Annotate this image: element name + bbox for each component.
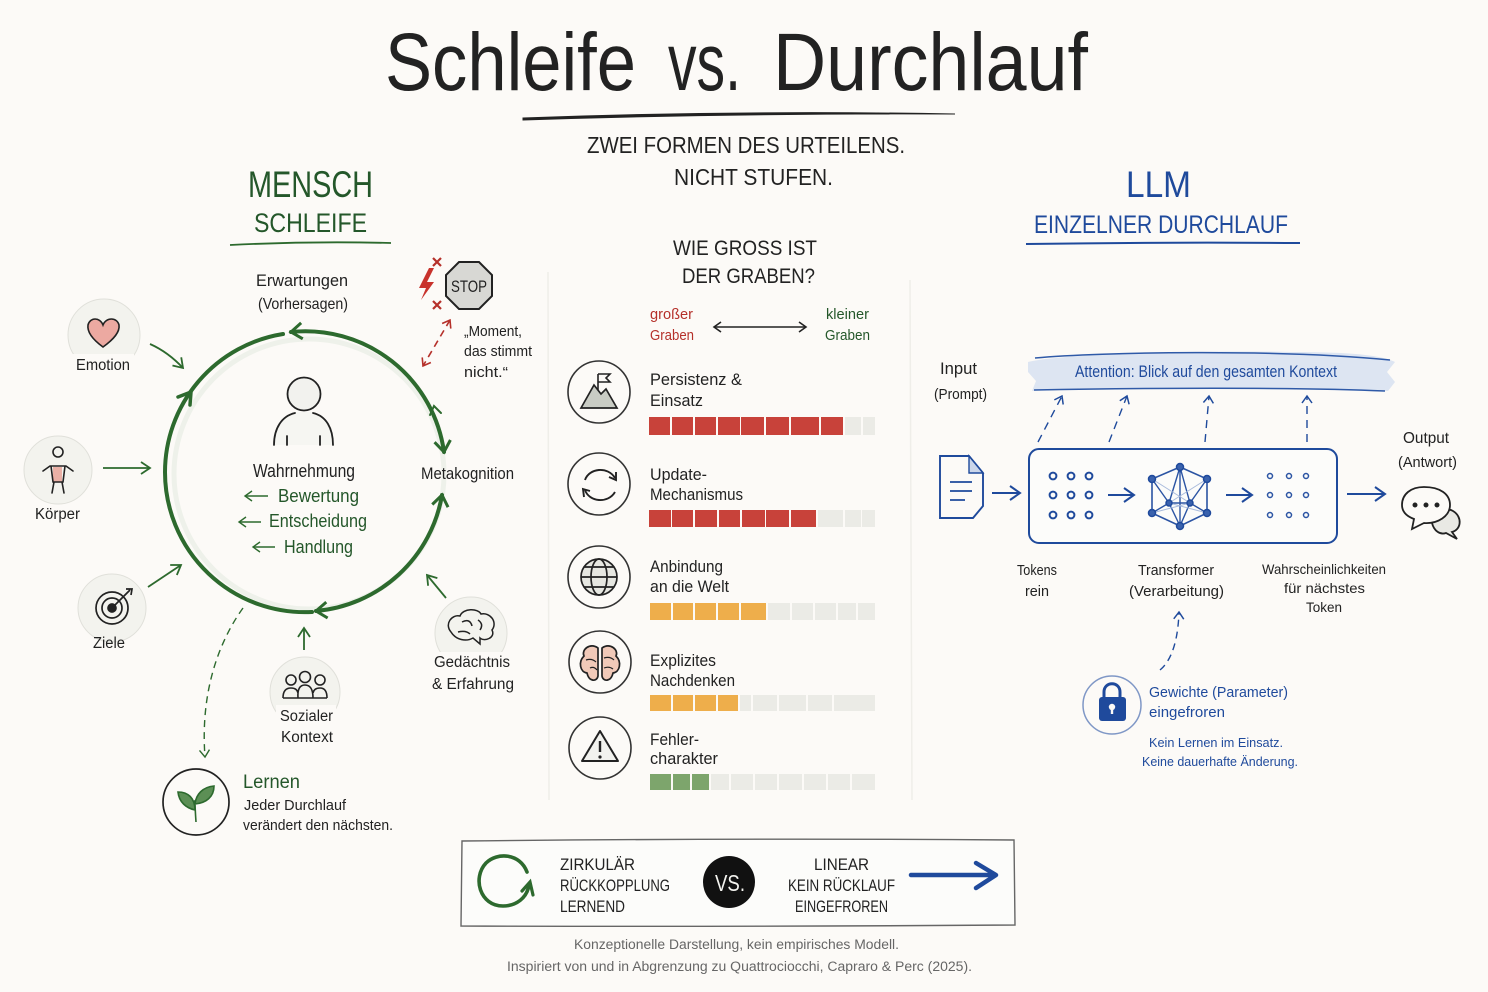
heading: Mensch Schleife: MENSCH (248, 164, 373, 205)
arrow: linear (911, 863, 996, 888)
label: Transformer: (Verarbeitung) (1129, 584, 1224, 600)
model box (1029, 449, 1337, 543)
callout: Moment: das stimmt (464, 344, 532, 360)
badge: VS (703, 856, 755, 908)
label: Erwartungen (256, 271, 348, 313)
panel: summary bar (461, 839, 1015, 926)
panel: LLM pipeline (934, 351, 1460, 769)
icon: chat bubbles (1402, 487, 1460, 539)
title: Schleife (385, 17, 636, 108)
heading: LLM einzelner Durchlauf (1026, 164, 1300, 244)
process steps: Wahrnehmung (253, 461, 355, 481)
text: frozen weights: Keine dauerhafte Änderung. (1142, 754, 1298, 769)
callout: Moment: nicht.“ (464, 365, 508, 381)
label: Tokens rein: rein (1025, 584, 1049, 600)
heading: Mensch Schleife (230, 164, 391, 245)
text: linear: LINEAR (814, 856, 869, 874)
label: Input: (Prompt) (934, 386, 987, 403)
input: Emotion: Emotion (76, 357, 130, 374)
label: Output: (Antwort) (1398, 454, 1457, 471)
text: frozen weights: Kein Lernen im Einsatz. (1149, 735, 1283, 750)
text: Lernen: Lernen (243, 772, 300, 793)
label: Wahrscheinlichkeiten: Wahrscheinlichkeiten (1262, 561, 1386, 577)
label: Wahrscheinlichkeiten: Token (1306, 599, 1342, 615)
row: Anbindung an die Welt (568, 546, 875, 620)
probabilities grid (1268, 474, 1308, 518)
heading: gap question (673, 237, 817, 288)
text: linear: EINGEFROREN (795, 898, 888, 916)
row: Explizites Nachdenken (569, 631, 875, 711)
text: circular: ZIRKULÄR (560, 856, 635, 874)
panel: human loop (24, 258, 532, 835)
row: Update-Mechanismus (568, 453, 875, 527)
scale legend: Graben (650, 327, 694, 344)
process steps (239, 461, 367, 557)
heading: gap question: DER GRABEN? (682, 265, 815, 288)
tokens grid (1050, 473, 1092, 518)
arrow: tokens to transformer (1108, 494, 1134, 496)
scale legend: kleiner (826, 306, 869, 323)
input: Sozialer Kontext: Kontext (281, 729, 334, 746)
text: circular (560, 856, 670, 916)
label: Tokens rein: Tokens (1017, 563, 1057, 579)
input: Sozialer Kontext (270, 628, 340, 746)
arrow: to model (992, 492, 1020, 494)
dashed attention arrows (1038, 396, 1307, 442)
input: Gedächtnis & Erfahrung: Gedächtnis (434, 654, 510, 671)
loop circle with arrows (165, 331, 444, 612)
text: circular: RÜCKKOPPLUNG (560, 877, 670, 895)
row: Persistenz: Persistenz & (650, 370, 743, 389)
row: Fehlercharakter: Fehler- (650, 730, 699, 749)
dashed red arrow (423, 320, 450, 366)
input: Gedächtnis & Erfahrung (427, 575, 518, 694)
badge: VS: VS. (715, 870, 745, 896)
label: Transformer: Transformer (1138, 563, 1214, 579)
icon: plant (163, 769, 229, 835)
arrow: to output (1347, 493, 1385, 495)
scale legend: Graben (825, 327, 870, 344)
label: Transformer (1129, 563, 1224, 600)
row: Update-Mechanismus: Mechanismus (650, 485, 743, 504)
text: frozen weights: Gewichte (Parameter) (1149, 684, 1288, 701)
text: circular: LERNEND (560, 898, 625, 916)
subtitle: ZWEI FORMEN DES URTEILENS. (587, 132, 905, 158)
subtitle (587, 132, 905, 190)
row: Explizites Nachdenken: Explizites (650, 651, 716, 670)
dashed arrow to Lernen (204, 608, 243, 757)
text: Lernen (243, 772, 393, 834)
label: Erwartungen: Erwartungen (256, 271, 348, 290)
input: Körper: Körper (35, 506, 80, 523)
callout: Moment (464, 324, 532, 381)
heading: LLM einzelner Durchlauf: LLM (1126, 164, 1191, 205)
input: Gedächtnis & Erfahrung: & Erfahrung (432, 676, 514, 693)
label: Output (1398, 430, 1457, 471)
title: Durchlauf (773, 17, 1088, 108)
row: Explizites Nachdenken: Nachdenken (650, 671, 735, 690)
transformer network (1148, 464, 1210, 530)
text: linear: KEIN RÜCKLAUF (788, 877, 895, 895)
title (385, 17, 1088, 120)
heading: gap question: WIE GROSS IST (673, 237, 817, 260)
label: Metakognition: Metakognition (421, 465, 514, 483)
heading: LLM einzelner Durchlauf: EINZELNER DURCHLAUF (1034, 211, 1288, 239)
icon: lock (1083, 676, 1141, 734)
label: Wahrscheinlichkeiten (1262, 561, 1386, 615)
subtitle: NICHT STUFEN. (674, 164, 833, 190)
icon: document (940, 456, 983, 518)
heading: Mensch Schleife: SCHLEIFE (254, 208, 367, 238)
row: Fehlercharakter: charakter (650, 749, 718, 768)
panel: gap comparison (548, 237, 912, 800)
input: Körper (24, 436, 150, 523)
scale legend: großer (650, 306, 693, 323)
row: Anbindung an die Welt: an die Welt (650, 577, 729, 596)
process steps: Entscheidung (269, 511, 367, 531)
arrow: transformer to probabilities (1226, 494, 1252, 496)
row: Persistenz: Einsatz (650, 391, 703, 410)
icon: circular arrow (479, 856, 533, 906)
attention ribbon: Attention: Blick auf den gesamten Kontext (1075, 363, 1337, 381)
footer note: Konzeptionelle Darstellung, kein empirisches Modell. (574, 937, 899, 952)
scale legend (650, 306, 870, 344)
label: Tokens rein (1017, 563, 1057, 600)
label: Erwartungen: (Vorhersagen) (258, 296, 348, 313)
process steps: Handlung (284, 537, 353, 557)
text: frozen weights (1142, 684, 1298, 769)
process steps: Bewertung (278, 486, 359, 506)
input: Ziele (78, 565, 181, 652)
input: Emotion (68, 299, 183, 374)
text: Lernen: verändert den nächsten. (243, 818, 393, 834)
footer note: Inspiriert von und in Abgrenzung zu Quattrociocchi, Capraro & Perc (2025). (507, 959, 972, 974)
attention ribbon (1028, 351, 1395, 391)
label: Wahrscheinlichkeiten: für nächstes (1284, 580, 1365, 596)
row: Anbindung an die Welt: Anbindung (650, 557, 723, 576)
dashed arrow: weights to transformer (1160, 612, 1179, 670)
icon: person (274, 378, 334, 445)
text: Lernen: Jeder Durchlauf (244, 798, 347, 814)
label: Output: Output (1403, 430, 1450, 447)
icon: stop sign with lightning (419, 258, 492, 309)
footer note (507, 937, 972, 974)
input: Ziele: Ziele (93, 635, 125, 652)
row: Persistenz (568, 361, 875, 435)
text: frozen weights: eingefroren (1149, 704, 1225, 721)
label: Input: Input (940, 359, 977, 378)
icon: stop sign with lightning: STOP (451, 277, 487, 296)
callout: Moment: „Moment, (464, 324, 522, 340)
row: Fehlercharakter (569, 717, 875, 790)
input: Sozialer Kontext: Sozialer (280, 708, 333, 725)
row: Update-Mechanismus: Update- (650, 465, 707, 484)
label: Input (934, 359, 987, 403)
title: vs. (668, 17, 741, 108)
text: linear (788, 856, 895, 916)
